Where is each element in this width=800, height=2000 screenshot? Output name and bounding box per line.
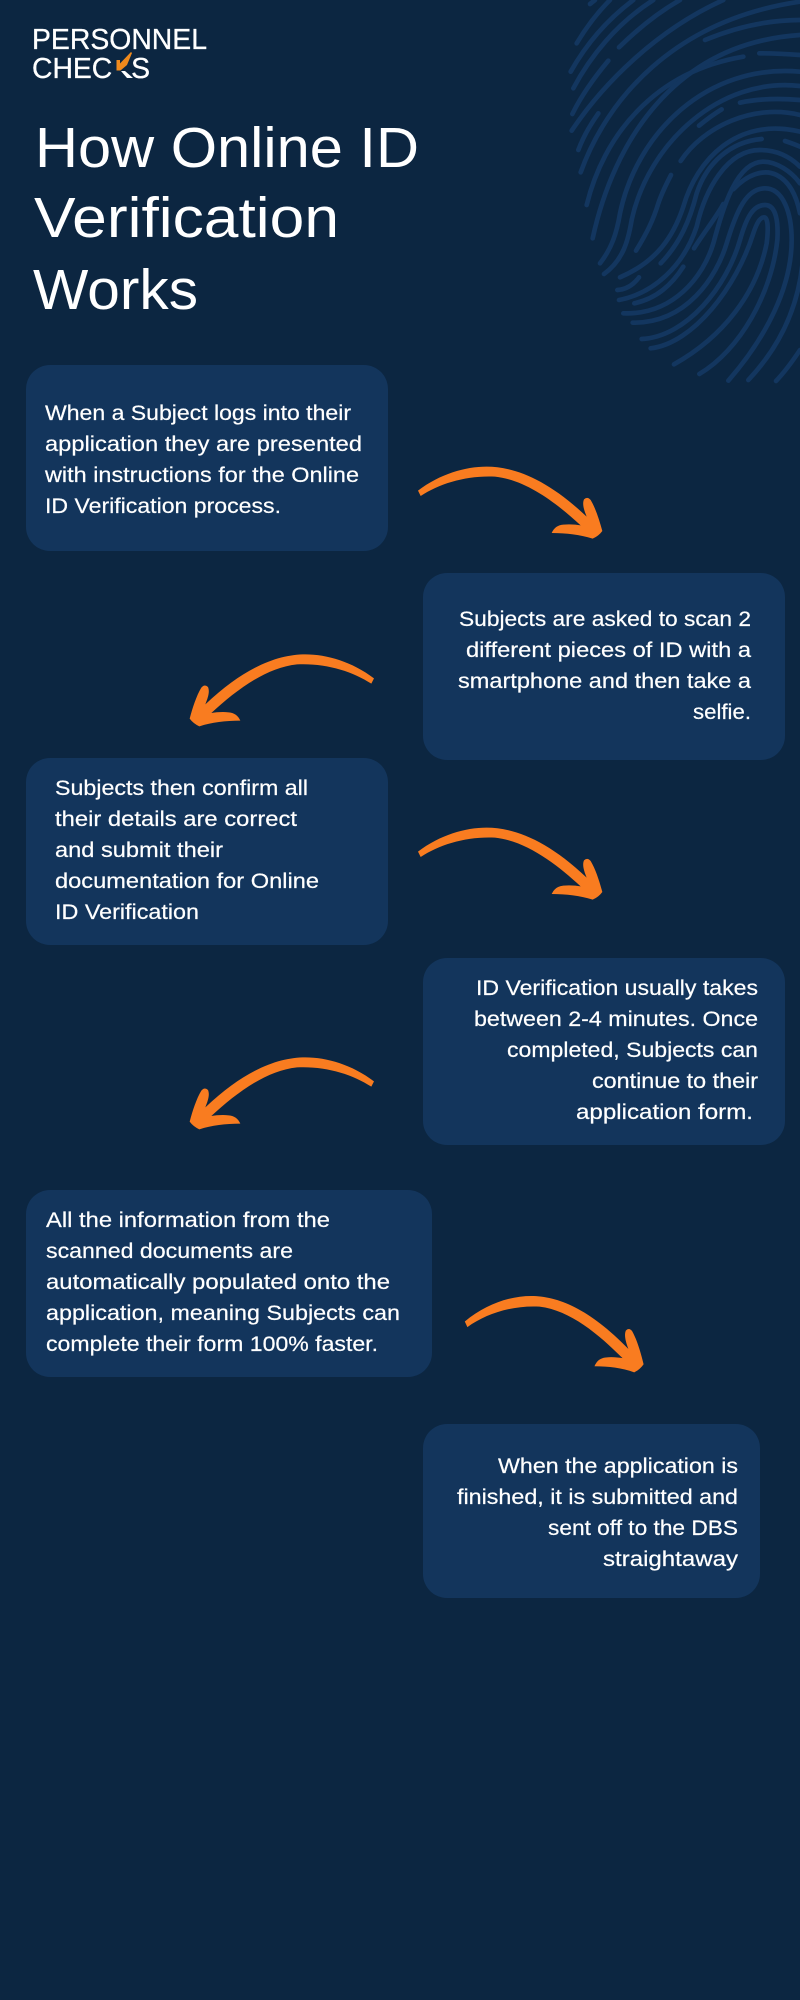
panel: step 1: ID Verification process. [45,495,281,518]
title: Verification [34,186,339,250]
panel: step 3: documentation for Online [55,870,319,893]
panel: step 5: application, meaning Subjects can [46,1302,400,1325]
panel: step 4: ID Verification usually takes [476,977,758,1000]
panel: step 3: their details are correct [55,808,297,831]
panel: step 6 [423,1424,760,1598]
panel: step 4: completed, Subjects can [507,1039,758,1062]
arrow: step 2 to step 3 [190,654,374,726]
panel: step 1 [26,365,388,551]
panel: step 1: application they are presented [45,433,362,456]
panel: step 5: scanned documents are [46,1240,293,1263]
panel: step 5: automatically populated onto the [46,1271,390,1294]
logo: Personnel Checks: CHECKS [32,53,150,85]
panel: step 2: different pieces of ID with a [466,639,751,662]
panel: step 3: Subjects then confirm all [55,777,308,800]
title [33,116,419,322]
panel: step 4 [423,958,785,1145]
panel: step 2: selfie. [693,701,751,724]
panel: step 2 [423,573,785,760]
panel: step 3: ID Verification [55,901,199,924]
logo: Personnel Checks [32,24,207,85]
panel: step 6: finished, it is submitted and [457,1486,738,1509]
logo: Personnel Checks: PERSONNEL [32,24,207,56]
arrow: step 1 to step 2 [418,467,602,539]
title: Works [33,258,198,322]
panel: step 4: continue to their [592,1070,758,1093]
arrow: step 4 to step 5 [190,1057,374,1129]
panel: step 5: All the information from the [46,1209,330,1232]
panel: step 2: Subjects are asked to scan 2 [459,608,751,631]
title: How Online ID [35,116,419,180]
panel: step 3 [26,758,388,945]
panel: step 6: straightaway [603,1548,739,1571]
panel: step 1: with instructions for the Online [44,464,359,487]
panel: step 5: complete their form 100% faster. [46,1333,378,1356]
arrow: step 5 to step 6 [465,1296,644,1372]
arrow: step 3 to step 4 [418,828,602,900]
panel: step 6: sent off to the DBS [548,1517,738,1540]
panel: step 4: application form. [576,1101,753,1124]
icon: fingerprint background [571,0,800,381]
panel: step 4: between 2-4 minutes. Once [474,1008,758,1031]
panel: step 1: When a Subject logs into their [45,402,351,425]
panel: step 3: and submit their [55,839,223,862]
panel: step 5 [26,1190,432,1377]
panel: step 2: smartphone and then take a [458,670,751,693]
panel: step 6: When the application is [498,1455,738,1478]
